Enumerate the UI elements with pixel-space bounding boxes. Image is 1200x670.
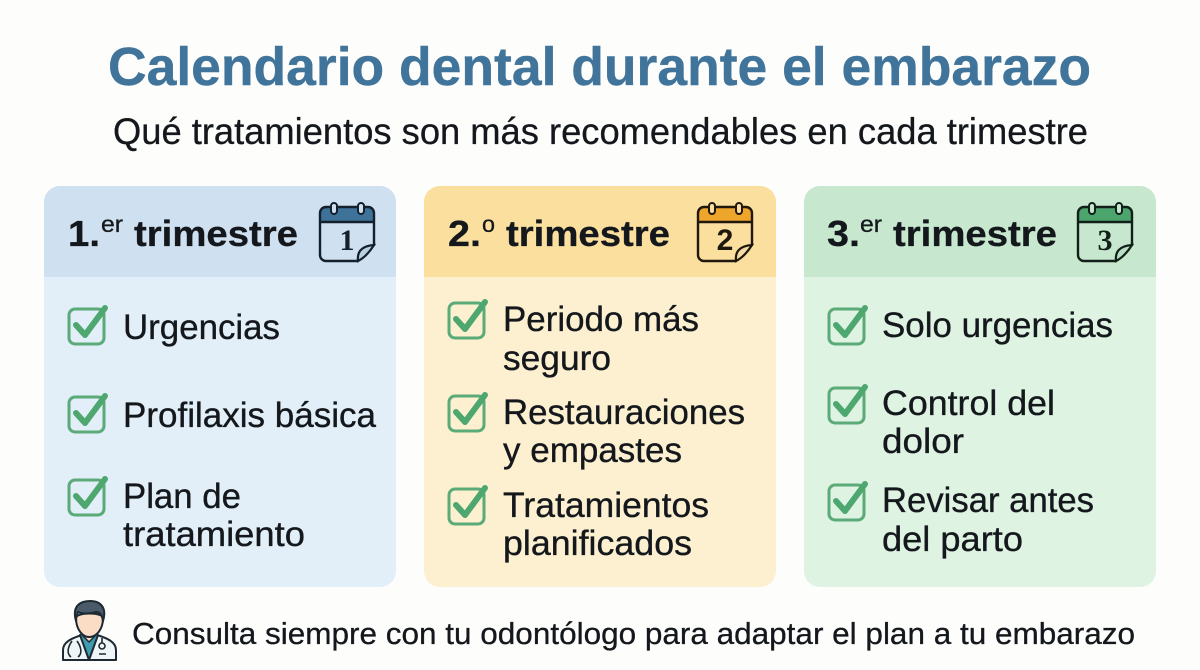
item: Solo urgencias: Solo urgencias xyxy=(882,306,1113,345)
heading: 3.er trimestre: trimestre xyxy=(893,213,1057,254)
heading: 1.er trimestre: trimestre xyxy=(134,213,298,254)
title: Calendario dental durante el embarazo xyxy=(108,37,1091,97)
icon: calendar 2: 2 xyxy=(717,224,733,257)
icon: calendar 3: 3 xyxy=(1098,224,1112,257)
item: Periodo más seguro: seguro xyxy=(503,339,611,378)
item: Urgencias: Urgencias xyxy=(123,308,280,347)
icon: calendar 1: 1 xyxy=(340,224,354,257)
heading: 2.º trimestre: o xyxy=(482,211,495,237)
item: Periodo más seguro: Periodo más xyxy=(503,300,699,339)
item: Revisar antes del parto: del parto xyxy=(882,520,1023,559)
item: Periodo más seguro xyxy=(449,300,699,378)
panel: third trimester xyxy=(804,186,1156,587)
item: Control del dolor: dolor xyxy=(882,422,964,461)
heading: 2.º trimestre xyxy=(448,211,670,254)
item: Plan de tratamiento: Plan de xyxy=(123,477,241,516)
item: Control del dolor xyxy=(829,384,1055,461)
item: Restauraciones y empastes: y empastes xyxy=(503,431,682,470)
heading: 3.er trimestre: 3. xyxy=(827,213,860,254)
item: Tratamientos planificados xyxy=(449,486,709,563)
heading: 2.º trimestre: 2. xyxy=(448,213,481,254)
heading: 2.º trimestre: trimestre xyxy=(506,213,670,254)
icon: calendar 2 xyxy=(698,203,752,261)
item: Profilaxis básica: Profilaxis básica xyxy=(123,396,377,435)
icon: doctor xyxy=(63,601,116,660)
item: Plan de tratamiento xyxy=(69,477,305,554)
footer note: Consulta siempre con tu odontólogo para adaptar el plan a tu embarazo xyxy=(132,616,1135,651)
heading: 1.er trimestre: 1. xyxy=(68,213,100,254)
item: Restauraciones y empastes xyxy=(449,393,745,470)
icon: calendar 3 xyxy=(1078,203,1132,261)
item: Restauraciones y empastes: Restauraciones xyxy=(503,393,745,432)
heading: 3.er trimestre: er xyxy=(860,211,882,237)
heading: 1.er trimestre xyxy=(68,211,298,254)
item: Tratamientos planificados: Tratamientos xyxy=(503,486,709,525)
item: Revisar antes del parto xyxy=(829,481,1094,559)
panel: first trimester xyxy=(44,186,396,587)
heading: 3.er trimestre xyxy=(827,211,1057,254)
item: Tratamientos planificados: planificados xyxy=(503,524,692,563)
panel: second trimester xyxy=(424,186,776,587)
item: Plan de tratamiento: tratamiento xyxy=(123,515,305,554)
icon: calendar 1 xyxy=(320,203,374,261)
heading: 1.er trimestre: er xyxy=(101,211,123,237)
item: Control del dolor: Control del xyxy=(882,384,1055,423)
subtitle: Qué tratamientos son más recomendables en cada trimestre xyxy=(113,111,1088,152)
item: Revisar antes del parto: Revisar antes xyxy=(882,481,1094,520)
